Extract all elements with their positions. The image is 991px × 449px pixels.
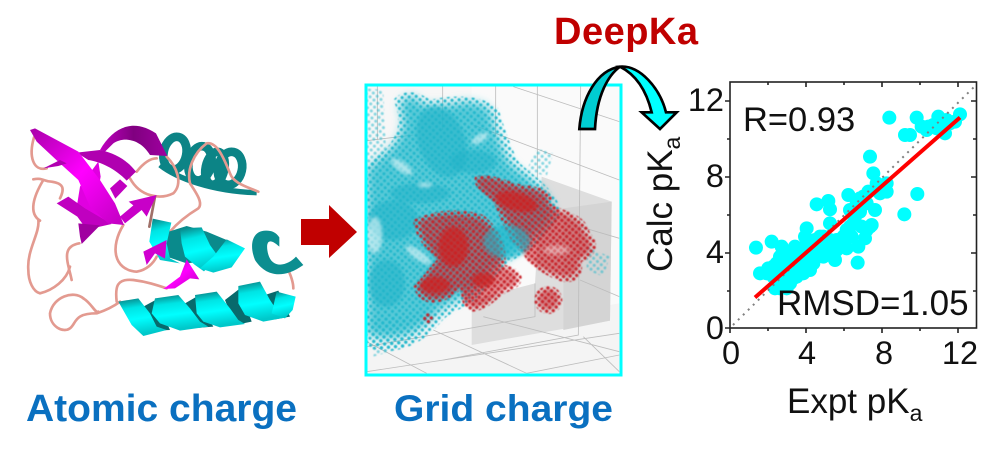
y axis title: a [659,136,685,149]
y axis tick labels [688,82,724,346]
y axis tick labels: 0 [706,310,724,346]
curved arrow [579,67,677,129]
coil loops [28,137,293,330]
stat: R: R=0.93 [743,101,855,139]
stat: RMSD: RMSD=1.05 [777,284,969,323]
scatter plot [641,82,978,426]
y axis tick labels: 8 [706,158,724,194]
identity dotted line [733,87,974,325]
label: Grid charge: Grid charge [394,388,613,429]
beta strands [30,126,199,289]
plot frame and ticks [725,82,976,333]
label: Atomic charge: Atomic charge [26,388,297,430]
x axis tick labels: 4 [798,335,816,371]
middle helix [149,219,245,273]
cyan frame [366,85,621,375]
title: DeepKa: DeepKa [554,11,699,53]
x axis tick labels: 0 [722,335,740,371]
y axis tick labels: 12 [688,82,724,118]
red arrow [301,205,357,258]
grid charge panel [366,85,621,375]
x axis tick labels: 12 [942,335,978,371]
x axis title: a [910,400,923,426]
red charge cloud [413,175,596,324]
y axis title: Calc pK [641,149,680,272]
3D grid and charge cloud [367,86,619,373]
scatter points [749,107,967,295]
x axis tick labels: 8 [875,335,893,371]
x axis tick labels [722,335,978,371]
fit line [755,118,960,298]
cyan charge cloud [367,88,610,357]
bottom helix [118,282,296,336]
y axis tick labels: 4 [706,234,724,270]
top helix [160,135,257,193]
protein ribbon: atomic charge [28,126,303,336]
x axis title: Expt pK [787,382,910,421]
right hairpin helix [252,231,303,274]
